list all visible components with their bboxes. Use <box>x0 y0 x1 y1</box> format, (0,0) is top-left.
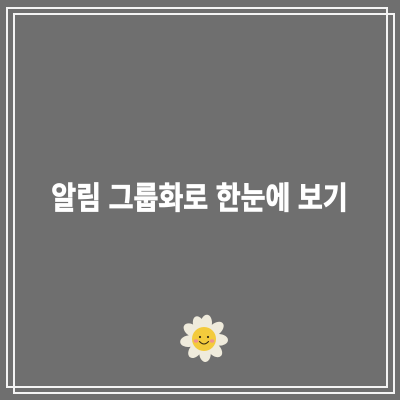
title: 알림 그룹화로 한눈에 보기 <box>51 181 348 216</box>
icon: smiling daisy <box>180 314 228 362</box>
